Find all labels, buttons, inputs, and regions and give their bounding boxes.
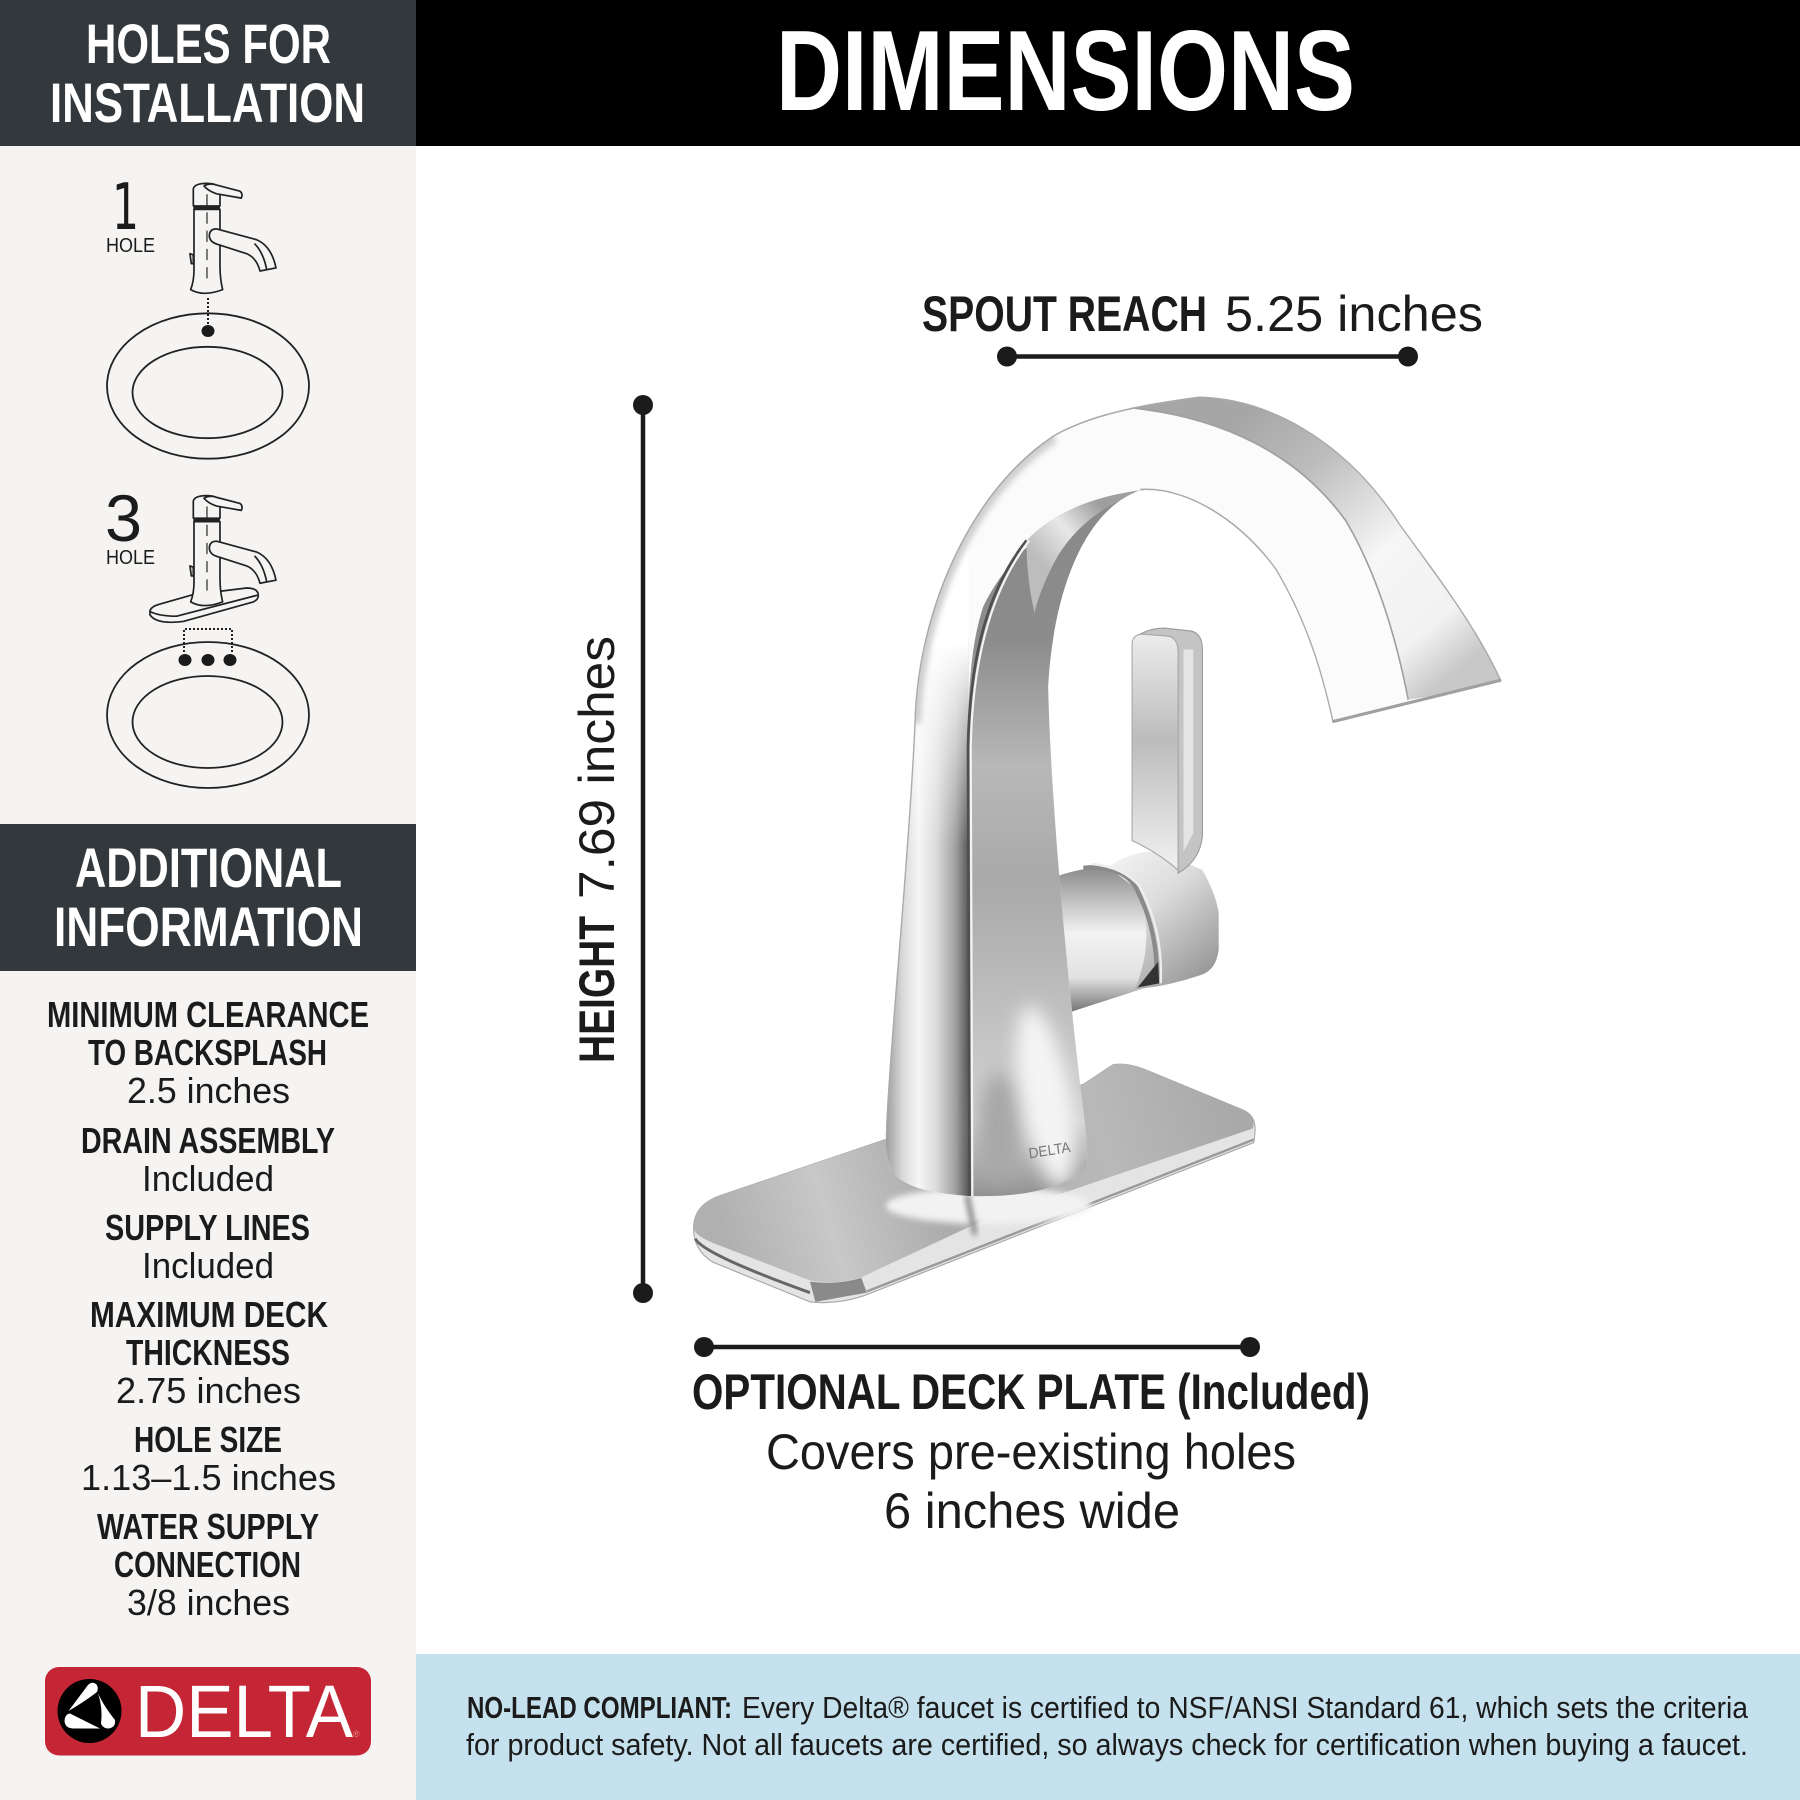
3 hole installation diagram [105, 481, 309, 788]
hole size [81, 1419, 336, 1498]
spout reach dimension [922, 286, 1483, 366]
icon: sink with one hole [107, 313, 309, 459]
header: additional information: ADDITIONAL [75, 836, 342, 899]
water supply connection [97, 1506, 319, 1623]
label: 5.25 inches [1225, 286, 1483, 342]
measure line [633, 395, 653, 1303]
arch inner shading [914, 435, 1054, 723]
maximum deck thickness: MAXIMUM DECK [90, 1294, 328, 1335]
maximum deck thickness [90, 1294, 328, 1411]
1 hole installation diagram [106, 171, 309, 459]
header: additional information: INFORMATION [54, 895, 363, 958]
dotted guide line [207, 298, 209, 324]
label: OPTIONAL DECK PLATE (Included) [692, 1364, 1370, 1420]
faucet body clipped to silhouette [880, 392, 1508, 1207]
header: additional information [0, 824, 416, 971]
header: holes for installation: HOLES FOR [86, 12, 331, 75]
number 3 label: HOLE [106, 547, 155, 569]
supply lines [105, 1207, 310, 1286]
maximum deck thickness: 2.75 inches [116, 1370, 301, 1411]
maximum deck thickness: THICKNESS [126, 1332, 290, 1373]
minimum clearance: TO BACKSPLASH [88, 1032, 327, 1073]
icon: delta emblem [58, 1679, 122, 1743]
number 3 label: 3 [105, 481, 142, 555]
faucet product image [694, 392, 1508, 1303]
label [569, 636, 625, 1063]
no-lead compliant note [416, 1654, 1800, 1800]
height dimension [569, 395, 653, 1303]
drain assembly: Included [142, 1158, 274, 1199]
number 1 label: HOLE [106, 235, 155, 257]
ridge line [968, 540, 1026, 1198]
measure line [694, 1337, 1260, 1357]
drain assembly: DRAIN ASSEMBLY [81, 1120, 335, 1161]
icon: faucet on deck plate [150, 496, 276, 622]
spout side band [1129, 392, 1508, 700]
fade into arch [922, 637, 968, 834]
hole size: 1.13–1.5 inches [81, 1457, 336, 1498]
base metal [886, 876, 1088, 1196]
water supply connection: CONNECTION [114, 1544, 301, 1585]
neck right face [968, 489, 1151, 1201]
delta logo [45, 1667, 371, 1756]
deck plate [694, 1064, 1255, 1303]
header: holes for installation: INSTALLATION [50, 71, 365, 134]
hole size: HOLE SIZE [134, 1419, 282, 1460]
header: dimensions [416, 0, 1800, 146]
measure line [997, 346, 1418, 366]
neck left face [880, 637, 969, 1207]
minimum clearance: MINIMUM CLEARANCE [47, 994, 369, 1035]
drain assembly [81, 1120, 335, 1199]
silhouette edge [886, 397, 1501, 1136]
header: dimensions: DIMENSIONS [776, 8, 1355, 135]
label: 6 inches wide [884, 1483, 1180, 1539]
label: 7.69 inches [569, 636, 625, 899]
water supply connection: 3/8 inches [127, 1582, 290, 1623]
brand mark on faucet: DELTA [1028, 1138, 1072, 1162]
number 3 label [105, 481, 155, 569]
deck plate dimension [692, 1337, 1370, 1539]
header: holes for installation [0, 0, 416, 146]
throat highlight [1026, 489, 1151, 613]
spout underside edge [1332, 680, 1501, 722]
minimum clearance: 2.5 inches [127, 1070, 290, 1111]
minimum clearance [47, 994, 369, 1111]
label: HEIGHT [569, 916, 625, 1063]
handle hub and cylinder [1048, 852, 1219, 1014]
icon: sink with three holes [107, 642, 309, 788]
supply lines: Included [142, 1245, 274, 1286]
additional information list [47, 994, 369, 1623]
delta logo: ® [353, 1729, 360, 1739]
neck reflections [978, 1001, 1086, 1192]
delta logo: DELTA [135, 1670, 354, 1753]
label [922, 286, 1483, 342]
crease line [1129, 408, 1408, 700]
sidebar panel [0, 0, 416, 1800]
no-lead compliant note: NO-LEAD COMPLIANT: [467, 1690, 732, 1725]
number 1 label: 1 [112, 171, 139, 245]
lever handle [1132, 628, 1202, 873]
water supply connection: WATER SUPPLY [97, 1506, 319, 1547]
dotted guide bracket [184, 629, 232, 652]
label: SPOUT REACH [922, 286, 1207, 342]
label: Covers pre-existing holes [766, 1424, 1296, 1480]
icon: single hole faucet [190, 183, 276, 293]
label [692, 1364, 1370, 1539]
supply lines: SUPPLY LINES [105, 1207, 310, 1248]
